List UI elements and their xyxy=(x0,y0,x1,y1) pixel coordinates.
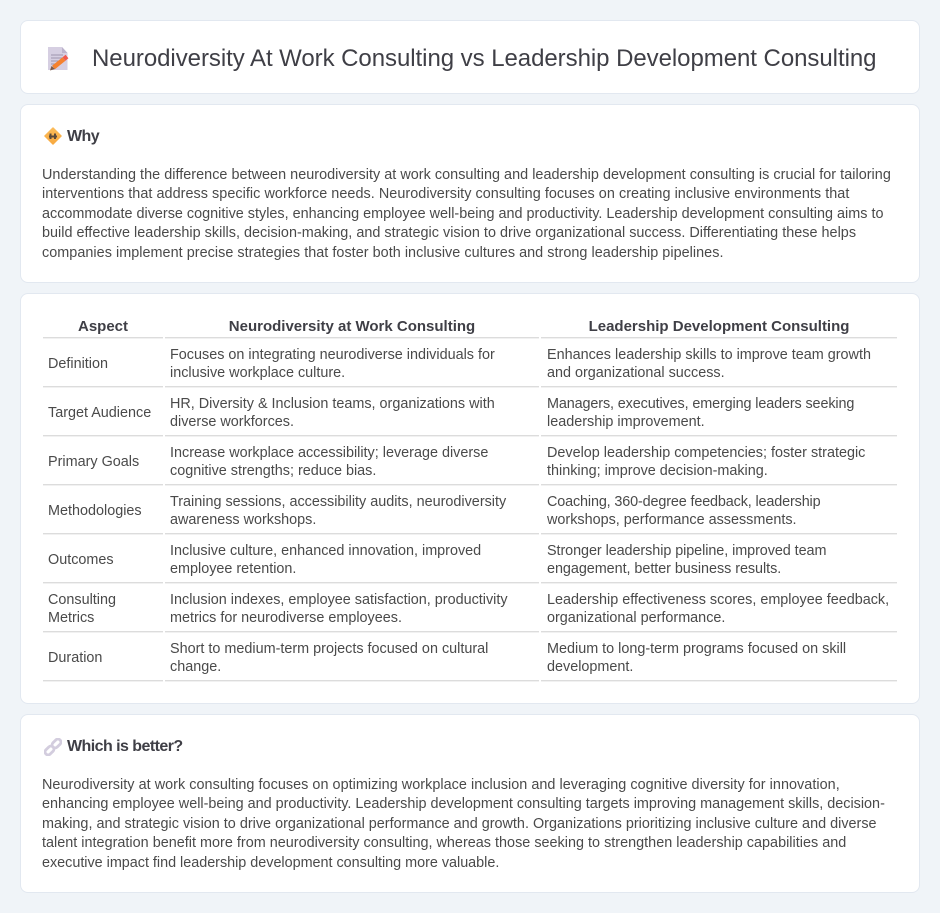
which is better text block: making, and strategic vision to drive organizational performance and growth. Organizations prioritizing inclusive culture and diverse xyxy=(42,816,877,832)
outcomes: neurodiversity xyxy=(170,543,481,577)
why text block: build effective leadership skills, decision-making, and strategic vision to drive organizational success. Differentiating these helps xyxy=(42,225,856,241)
which is better text block: executive impact find leadership development consulting more valuable. xyxy=(42,855,499,871)
duration: leadership: Medium to long-term programs focused on skill xyxy=(547,641,846,657)
target audience: neurodiversity: HR, Diversity & Inclusion teams, organizations with xyxy=(170,396,495,412)
methodologies: leadership: workshops, performance assessments. xyxy=(547,512,797,528)
icon: warning diamond xyxy=(44,127,62,145)
definition: leadership xyxy=(547,347,871,381)
heading: why: Why xyxy=(67,128,99,145)
icon: chain link xyxy=(44,738,62,756)
duration: neurodiversity: Short to medium-term projects focused on cultural xyxy=(170,641,488,657)
consulting metrics: leadership: Leadership effectiveness scores, employee feedback, xyxy=(547,592,889,608)
consulting metrics: leadership xyxy=(547,592,889,626)
row: target audience: Target Audience xyxy=(48,405,151,421)
outcomes: neurodiversity: Inclusive culture, enhanced innovation, improved xyxy=(170,543,481,559)
row: consulting metrics xyxy=(48,592,116,626)
methodologies: neurodiversity xyxy=(170,494,506,528)
duration: neurodiversity: change. xyxy=(170,659,221,675)
row: consulting metrics: Consulting xyxy=(48,592,116,608)
definition: neurodiversity xyxy=(170,347,495,381)
outcomes: leadership xyxy=(547,543,826,577)
definition: neurodiversity: inclusive workplace culture. xyxy=(170,365,345,381)
panel: why xyxy=(20,104,920,283)
which is better text block xyxy=(42,776,885,871)
definition: neurodiversity: Focuses on integrating neurodiverse individuals for xyxy=(170,347,495,363)
row: methodologies: Methodologies xyxy=(48,503,142,519)
primary goals: leadership: Develop leadership competencies; foster strategic xyxy=(547,445,865,461)
methodologies: neurodiversity: Training sessions, accessibility audits, neurodiversity xyxy=(170,494,506,510)
header panel xyxy=(20,20,920,94)
primary goals: neurodiversity xyxy=(170,445,488,479)
definition: leadership: and organizational success. xyxy=(547,365,725,381)
why text block: Understanding the difference between neurodiversity at work consulting and leadership development consulting is crucial for tailoring xyxy=(42,166,891,182)
definition: leadership: Enhances leadership skills to improve team growth xyxy=(547,347,871,363)
duration: leadership xyxy=(547,641,846,675)
which is better text block: Neurodiversity at work consulting focuses on optimizing workplace inclusion and leveraging cognitive diversity for innovation, xyxy=(42,776,840,792)
title: Neurodiversity At Work Consulting vs Leadership Development Consulting xyxy=(92,45,876,72)
target audience: leadership: leadership improvement. xyxy=(547,414,705,430)
methodologies: leadership: Coaching, 360-degree feedback, leadership xyxy=(547,494,820,510)
target audience: neurodiversity: diverse workforces. xyxy=(170,414,294,430)
outcomes: leadership: Stronger leadership pipeline, improved team xyxy=(547,543,826,559)
duration: neurodiversity xyxy=(170,641,488,675)
table header: leadership: Leadership Development Consulting xyxy=(589,318,849,335)
row: definition: Definition xyxy=(48,356,108,372)
which is better text block: enhancing employee well-being and productivity. Leadership development consulting targets improving management skills, decision- xyxy=(42,796,885,812)
methodologies: leadership xyxy=(547,494,820,528)
target audience: leadership xyxy=(547,396,854,430)
primary goals: leadership xyxy=(547,445,865,479)
row: duration: Duration xyxy=(48,650,102,666)
table header: aspect: Aspect xyxy=(78,318,128,335)
which is better text block: talent integration benefit more from neurodiversity consulting, whereas those seeking to strengthen leadership capabilities and xyxy=(42,835,846,851)
heading: which is better: Which is better? xyxy=(67,738,183,755)
why text block: interventions that address specific workforce needs. Neurodiversity consulting focuses on creating inclusive environments that xyxy=(42,186,849,202)
consulting metrics: leadership: organizational performance. xyxy=(547,610,725,626)
row: outcomes: Outcomes xyxy=(48,552,114,568)
consulting metrics: neurodiversity: Inclusion indexes, employee satisfaction, productivity xyxy=(170,592,508,608)
icon: document with pencil xyxy=(48,47,68,70)
row: consulting metrics: Metrics xyxy=(48,610,94,626)
primary goals: neurodiversity: Increase workplace accessibility; leverage diverse xyxy=(170,445,488,461)
target audience: leadership: Managers, executives, emerging leaders seeking xyxy=(547,396,854,412)
primary goals: leadership: thinking; improve decision-making. xyxy=(547,463,768,479)
duration: leadership: development. xyxy=(547,659,633,675)
methodologies: neurodiversity: awareness workshops. xyxy=(170,512,316,528)
consulting metrics: neurodiversity xyxy=(170,592,508,626)
consulting metrics: neurodiversity: metrics for neurodiverse employees. xyxy=(170,610,402,626)
table header: neurodiversity: Neurodiversity at Work Consulting xyxy=(229,318,475,335)
panel: comparison table xyxy=(20,293,920,704)
primary goals: neurodiversity: cognitive strengths; reduce bias. xyxy=(170,463,376,479)
outcomes: neurodiversity: employee retention. xyxy=(170,561,296,577)
why text block xyxy=(42,166,891,261)
panel: which is better xyxy=(20,714,920,893)
outcomes: leadership: engagement, better business results. xyxy=(547,561,781,577)
why text block: accommodate diverse cognitive styles, enhancing employee well-being and productivity. Leadership development consulting aims to xyxy=(42,206,883,222)
why text block: companies implement precise strategies that foster both inclusive cultures and strong leadership pipelines. xyxy=(42,245,723,261)
row: primary goals: Primary Goals xyxy=(48,454,139,470)
target audience: neurodiversity xyxy=(170,396,495,430)
